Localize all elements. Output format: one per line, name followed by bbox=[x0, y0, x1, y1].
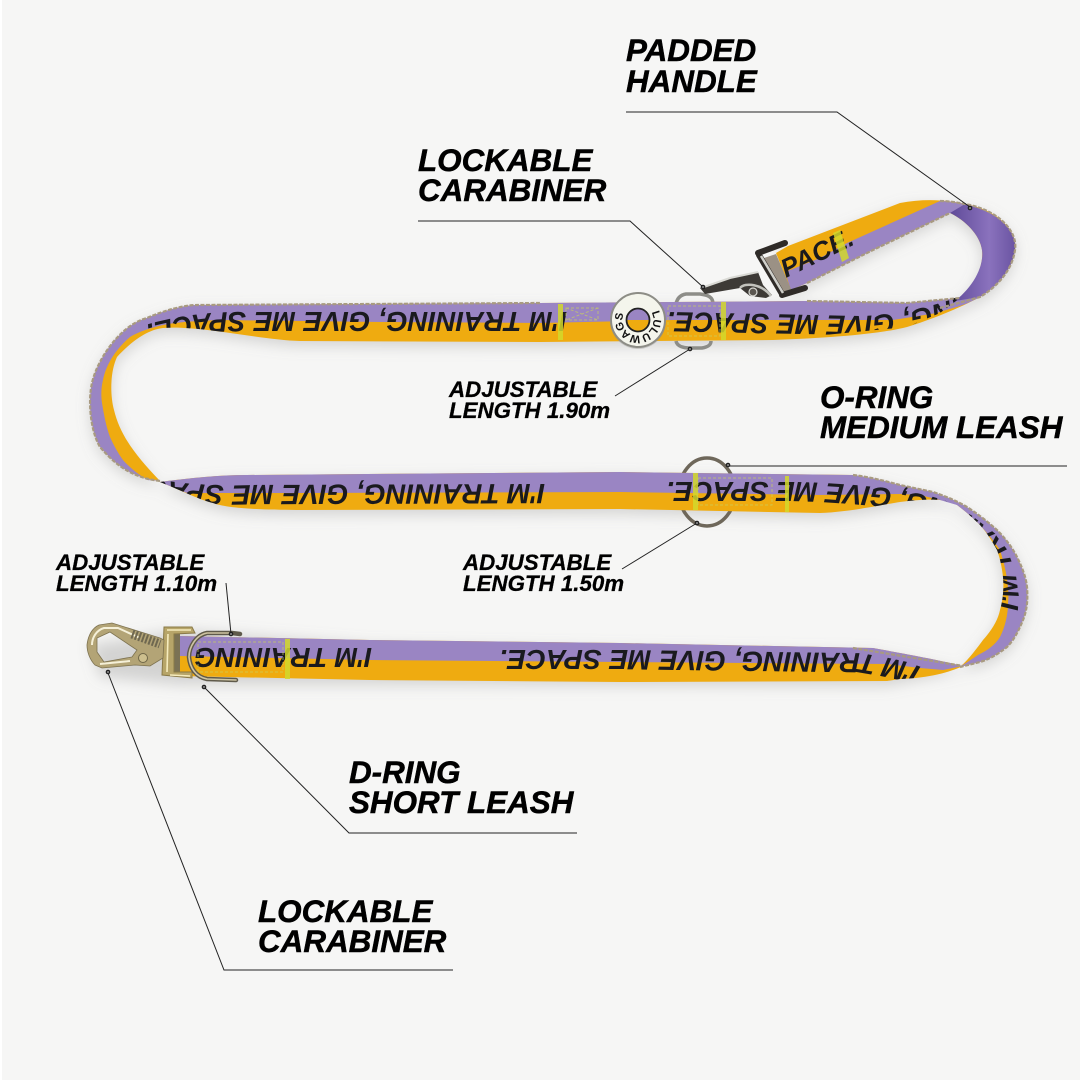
upper carabiner bbox=[700, 272, 772, 298]
callout: lower lockable carabiner: CARABINER bbox=[258, 924, 447, 959]
faint box stitching bbox=[198, 306, 772, 672]
strap printed text: PACE. bbox=[775, 222, 858, 283]
lower D-ring bbox=[189, 633, 240, 680]
callout: adjustable length 1.90m: LENGTH 1.90m bbox=[449, 398, 610, 423]
callout: adjustable length 1.10m bbox=[55, 550, 233, 636]
callout: adjustable length 1.90m: ADJUSTABLE bbox=[448, 377, 598, 402]
leash strap: middle run and right loop bbox=[160, 472, 1027, 667]
callout: O-ring medium leash: MEDIUM LEASH bbox=[820, 410, 1064, 445]
strap printed text: I'M TRAINING, GIVE ME SPACE. bbox=[502, 647, 920, 680]
callout: upper lockable carabiner: LOCKABLE bbox=[418, 143, 593, 178]
callout: adjustable length 1.50m: ADJUSTABLE bbox=[462, 550, 612, 575]
callout: D-ring short leash: SHORT LEASH bbox=[349, 785, 575, 820]
callout: lower lockable carabiner bbox=[106, 670, 453, 970]
brand disc bbox=[610, 292, 666, 349]
callout: padded handle: PADDED bbox=[626, 33, 756, 68]
O-ring bbox=[679, 458, 735, 526]
lower carabiner bbox=[87, 623, 164, 668]
callout: adjustable length 1.90m bbox=[448, 347, 692, 423]
callout: adjustable length 1.10m: LENGTH 1.10m bbox=[56, 571, 217, 596]
callout: lower lockable carabiner: LOCKABLE bbox=[258, 894, 433, 929]
strap printed text: I'M TRAINING, GIVE ME SPACE. bbox=[669, 298, 957, 335]
lime bar-tack stitches bbox=[285, 230, 849, 679]
callout: D-ring short leash: D-RING bbox=[349, 755, 461, 790]
callout: upper lockable carabiner bbox=[418, 143, 705, 289]
callout: D-ring short leash bbox=[202, 685, 577, 833]
callout: adjustable length 1.50m: LENGTH 1.50m bbox=[463, 571, 624, 596]
brand disc: LULUWAGS bbox=[615, 310, 662, 344]
leash strap: handle, top run and left loop bbox=[90, 200, 1015, 481]
strap printed text: I'M TRAINING, GIVE ME SPACE. bbox=[148, 308, 566, 332]
callout: O-ring medium leash: O-RING bbox=[820, 380, 933, 415]
strap shadow bbox=[90, 205, 1027, 686]
strap printed text bbox=[86, 125, 1019, 730]
lower buckle bbox=[162, 627, 195, 678]
callout: upper lockable carabiner: CARABINER bbox=[418, 173, 607, 208]
leash strap: lower run bbox=[180, 636, 963, 682]
strap stitching bbox=[90, 201, 1027, 667]
callout: padded handle bbox=[626, 33, 972, 210]
strap printed text: I'M TRAINING, GIVE ME SPACE. bbox=[668, 482, 1019, 610]
upper D-ring bbox=[676, 294, 713, 348]
upper buckle bbox=[758, 243, 805, 295]
callout: padded handle: HANDLE bbox=[626, 64, 758, 99]
callout: O-ring medium leash bbox=[726, 380, 1067, 467]
callout: adjustable length 1.10m: ADJUSTABLE bbox=[55, 550, 205, 575]
strap printed text: I'M TRAINING bbox=[195, 648, 372, 668]
callout: adjustable length 1.50m bbox=[462, 521, 699, 596]
